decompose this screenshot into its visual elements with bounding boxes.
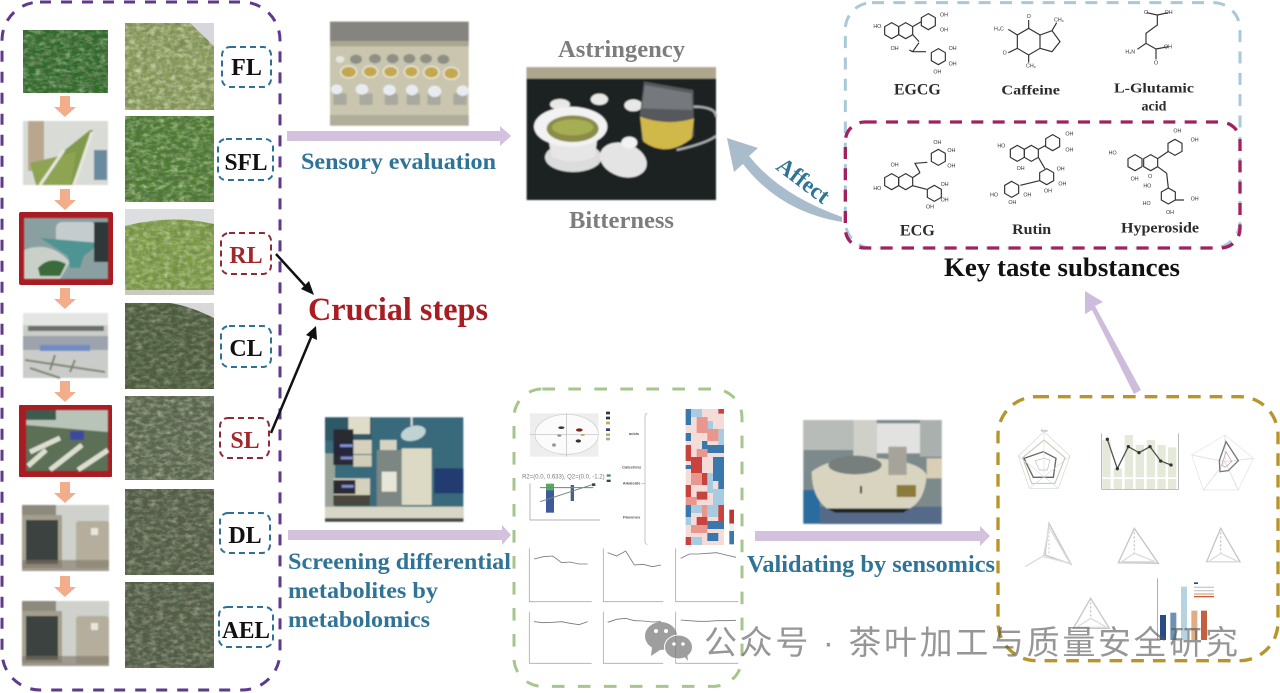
chart: PCA score plot <box>530 412 610 457</box>
label: AEL <box>219 607 273 647</box>
chart: triangle radar B <box>1118 528 1158 563</box>
text: screening differential metabolites by metabolomics: metabolomics <box>288 607 430 632</box>
panel: processing steps <box>2 2 280 690</box>
molecule: hyperoside: OH <box>1131 177 1139 183</box>
arrow: SL to crucial steps <box>271 326 317 433</box>
photo: carding machine <box>23 313 108 378</box>
chart: heatmap <box>622 409 734 545</box>
molecule: L-glutamic acid: OH <box>1164 45 1172 51</box>
molecule: hyperoside: OH <box>1173 129 1181 135</box>
chart: heatmap: Flavones <box>623 514 641 519</box>
molecule: EGCG: OH <box>949 46 957 52</box>
molecule: hyperoside: HO <box>1143 201 1151 207</box>
label: CL <box>221 326 271 367</box>
chart: radar A: Body <box>1041 428 1048 432</box>
chart: heatmap: acids <box>629 431 640 436</box>
label: RL, highlighted <box>221 233 271 274</box>
molecule: EGCG: HO <box>873 24 881 30</box>
molecule: rutin: OH <box>1057 167 1065 173</box>
label: L-glutamic acid: L-Glutamic <box>1114 82 1194 97</box>
molecule: L-glutamic acid <box>1114 10 1194 115</box>
molecule: hyperoside: OH <box>1166 210 1174 216</box>
label: hyperoside: Hyperoside <box>1121 221 1200 237</box>
photo: LC-MS instrument <box>325 417 463 522</box>
molecule: hyperoside <box>1109 129 1200 237</box>
heading: crucial steps: Crucial steps <box>308 292 488 328</box>
label: ECG: ECG <box>900 222 935 239</box>
label: SFL: SFL <box>224 150 268 176</box>
molecule: L-glutamic acid: OH <box>1165 10 1173 16</box>
molecule: rutin: OH <box>1044 189 1052 195</box>
arrows between process steps <box>54 96 76 597</box>
molecule: ECG: OH <box>941 197 949 203</box>
arrow: RL to crucial steps <box>276 254 314 295</box>
molecule: EGCG: OH <box>891 46 899 52</box>
molecule: rutin <box>990 132 1073 238</box>
molecule: EGCG: OH <box>949 61 957 67</box>
label: SL, highlighted: SL <box>230 428 260 454</box>
molecule: caffeine: O <box>1003 51 1007 57</box>
photo: tea set <box>527 67 716 200</box>
molecule: rutin: OH <box>1058 181 1066 187</box>
label: caffeine: Caffeine <box>1001 83 1060 98</box>
photo: SFL leaf sample <box>125 116 214 202</box>
text: screening differential metabolites by metabolomics: Screening differential <box>288 549 511 574</box>
molecule: ECG: OH <box>926 205 934 211</box>
molecule: L-glutamic acid: O <box>1154 61 1158 67</box>
molecule: hyperoside: HO <box>1143 183 1151 189</box>
label: DL <box>220 513 270 553</box>
label: CL: CL <box>229 336 263 362</box>
photo: drying oven second stage <box>22 601 109 666</box>
molecule: rutin: OH <box>1065 132 1073 138</box>
photo: RL leaf sample <box>125 209 214 295</box>
molecule: EGCG: OH <box>940 13 948 19</box>
panel: key taste substances, other compounds <box>845 3 1240 248</box>
molecule: ECG: OH <box>941 182 949 188</box>
photo: drying oven <box>22 505 109 571</box>
arrow: validating <box>755 526 990 546</box>
chart: combined bar and line <box>1102 433 1178 489</box>
molecule: rutin: HO <box>997 144 1005 150</box>
molecule: rutin: OH <box>1065 147 1073 153</box>
label: RL, highlighted: RL <box>229 243 263 269</box>
molecule: ECG: OH <box>947 148 955 154</box>
chart: permutation test <box>522 474 611 520</box>
molecule: L-glutamic acid: O <box>1144 10 1148 16</box>
watermark: WeChat icon <box>645 622 692 661</box>
molecule: rutin: OH <box>1023 193 1031 199</box>
molecule: caffeine: CH₃ <box>1054 17 1064 23</box>
molecule: L-glutamic acid: H₂N <box>1125 49 1135 55</box>
arrow: sensory evaluation <box>287 126 511 146</box>
molecule: EGCG: OH <box>940 28 948 34</box>
text: affect: Affect <box>772 153 835 209</box>
label: SL, highlighted <box>220 418 269 458</box>
photo: electronic tongue instrument <box>803 420 942 524</box>
chart: heatmap: Alkaloids <box>623 480 641 485</box>
molecule: caffeine: H₃C <box>994 27 1004 33</box>
molecule: EGCG: OH <box>933 69 941 75</box>
watermark: account name: 公众号 · 茶叶加工与质量安全研究 <box>704 624 1238 661</box>
text: bitterness: Bitterness <box>569 208 674 234</box>
panel: key taste substances, crucial compounds <box>845 122 1240 248</box>
text: astringency: Astringency <box>558 37 685 63</box>
photo: DL leaf sample <box>125 489 214 575</box>
arrow: screening <box>288 525 511 545</box>
chart: triangle radar A <box>1025 523 1071 567</box>
text: screening differential metabolites by metabolomics: metabolites by <box>288 578 439 603</box>
photo: AEL leaf sample <box>125 582 214 668</box>
photo: CL leaf sample <box>125 303 214 389</box>
chart: heatmap: Catechins <box>622 464 642 469</box>
molecule: hyperoside: OH <box>1191 137 1199 143</box>
arrow: affect <box>727 138 842 222</box>
label: FL: FL <box>231 55 262 81</box>
text: validating by sensomics: Validating by sensomics <box>747 552 995 578</box>
chart: radar A <box>1018 428 1070 488</box>
molecule: rutin: OH <box>1008 200 1016 206</box>
panel: sensomics validation charts <box>998 397 1278 661</box>
molecule: EGCG <box>873 13 957 99</box>
molecule: caffeine <box>994 14 1064 98</box>
molecule: ECG: HO <box>873 186 881 192</box>
photo: SL leaf sample <box>125 396 214 480</box>
label: L-glutamic acid: acid <box>1142 100 1167 115</box>
arrow: sensomics results to key taste substances <box>1085 291 1141 394</box>
label: AEL: AEL <box>222 618 270 644</box>
molecule: caffeine: O <box>1027 14 1031 20</box>
molecule: ECG <box>873 140 955 239</box>
photo: shaping machine, highlighted <box>19 405 112 477</box>
text: screening differential metabolites by metabolomics <box>288 549 511 632</box>
panel: metabolomics charts <box>514 389 742 686</box>
label: L-glutamic acid <box>1114 82 1194 115</box>
label: SFL <box>218 139 273 180</box>
photo: sensory evaluation cups <box>330 22 469 126</box>
label: EGCG: EGCG <box>894 82 941 99</box>
molecule: rutin: HO <box>990 193 998 199</box>
molecule: hyperoside: HO <box>1109 151 1117 157</box>
label: DL: DL <box>228 523 262 549</box>
label: rutin: Rutin <box>1012 222 1051 238</box>
photo: fresh leaves <box>23 30 108 93</box>
molecule: ECG: OH <box>933 140 941 146</box>
photo: FL leaf sample <box>125 23 214 110</box>
label: FL <box>222 47 271 87</box>
molecule: hyperoside: OH <box>1191 197 1199 203</box>
chart: radar C <box>1192 435 1253 490</box>
molecule: ECG: OH <box>947 163 955 169</box>
chart: line chart grid <box>529 548 738 663</box>
molecule: ECG: OH <box>891 163 899 169</box>
molecule: caffeine: CH₃ <box>1026 63 1036 69</box>
molecule: hyperoside: O <box>1148 174 1152 180</box>
heading: key taste substances: Key taste substances <box>944 253 1180 282</box>
chart: triangle radar C <box>1207 528 1240 562</box>
molecule: rutin: OH <box>1017 166 1025 172</box>
chart: permutation test: R2=(0.0, 0.633), Q2=(0.0, -1.2) <box>522 474 605 480</box>
photo: spreading machine <box>23 121 108 185</box>
text: sensory evaluation: Sensory evaluation <box>301 149 496 174</box>
photo: rolling machine, highlighted <box>19 212 113 285</box>
chart: triangle radar D <box>1073 598 1109 628</box>
chart: bar chart E <box>1158 578 1214 640</box>
